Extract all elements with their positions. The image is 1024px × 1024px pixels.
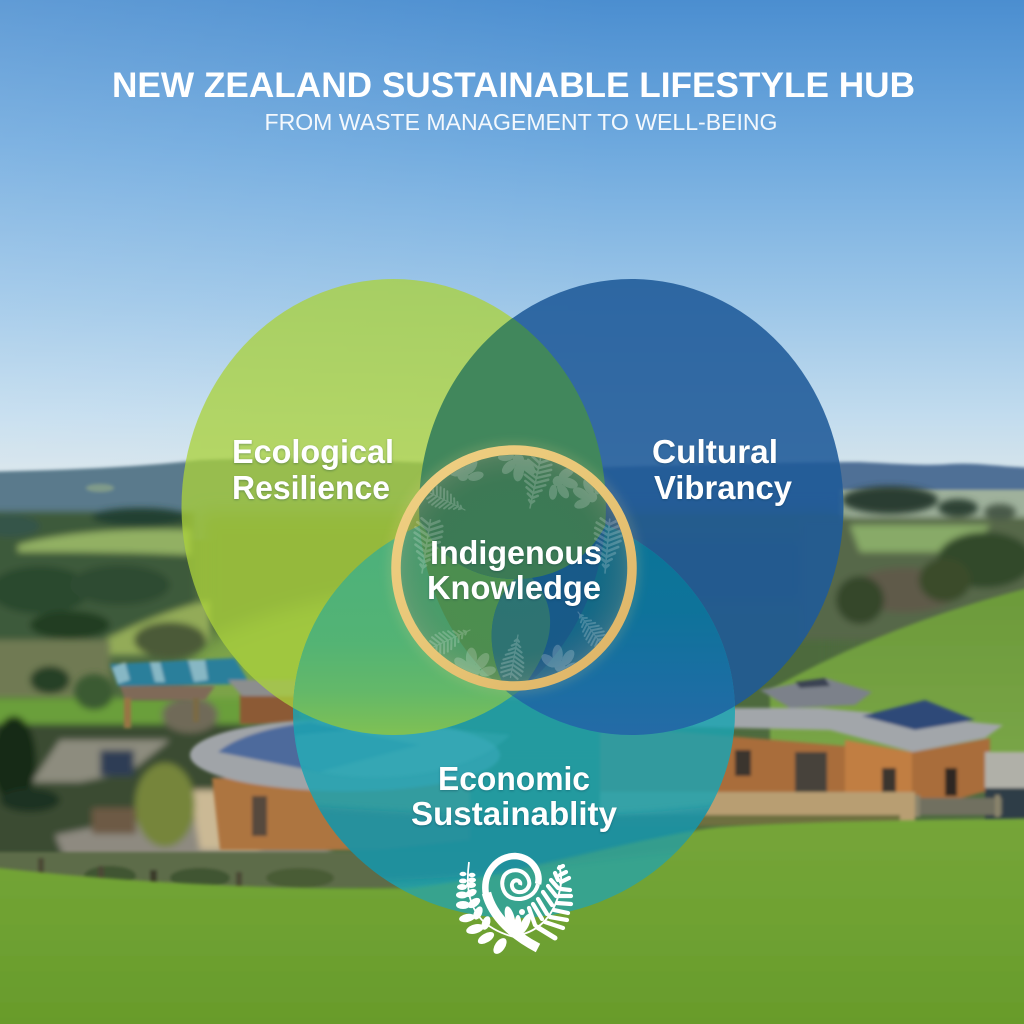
gold ring [396, 450, 632, 686]
overlap: ecological and economic [293, 526, 512, 735]
center label [427, 534, 602, 606]
overlap: cultural and economic [422, 524, 735, 735]
circle: economic sustainability [293, 506, 735, 918]
sky [0, 0, 1024, 490]
subtitle: FROM WASTE MANAGEMENT TO WELL-BEING [264, 109, 778, 135]
green hillside [770, 584, 1024, 770]
upper lens [419, 318, 606, 579]
center label: Knowledge [427, 569, 601, 606]
right solar building [600, 678, 1024, 826]
economic circle tonal bands [297, 732, 712, 918]
label: economic sustainability: Sustainablity [411, 795, 618, 832]
koru outer curl [485, 856, 539, 895]
label: economic sustainability: Economic [438, 760, 590, 797]
koru tail [486, 893, 538, 948]
soft mid-ground bands behind circles [190, 512, 840, 742]
fern pattern [409, 449, 623, 679]
title: NEW ZEALAND SUSTAINABLE LIFESTYLE HUB [112, 65, 915, 105]
ring glow [392, 446, 636, 690]
venn diagram [182, 279, 844, 930]
distant mountains [0, 459, 1024, 540]
right mid-distance fields and tree lines [800, 486, 1024, 640]
lower left of central lens [420, 520, 515, 692]
left solar canopy building [110, 658, 300, 728]
center circle: indigenous knowledge [392, 446, 636, 690]
label: ecological resilience: Ecological [232, 433, 394, 470]
circle: ecological resilience [182, 279, 606, 735]
center leaves [503, 905, 533, 936]
label: cultural vibrancy: Cultural [652, 433, 778, 470]
left lawn, trees and paths [0, 674, 330, 874]
lower right of central lens [512, 527, 605, 696]
label: ecological resilience [232, 433, 394, 506]
icon: koru fern emblem [456, 856, 571, 956]
label: ecological resilience: Resilience [232, 469, 390, 506]
left mid-distance fields and tree lines [0, 508, 210, 700]
koru inner spiral [502, 870, 538, 899]
foreground fence and shrubs [0, 852, 480, 904]
circle: cultural vibrancy [420, 279, 844, 735]
lower middle lens [492, 578, 550, 700]
label: cultural vibrancy: Vibrancy [654, 469, 793, 506]
ring shading [400, 454, 628, 682]
label: cultural vibrancy [652, 433, 793, 506]
land base [0, 500, 1024, 1024]
center label: Indigenous [430, 534, 602, 571]
right fern frond [520, 866, 571, 938]
foreground grass [0, 818, 1024, 1024]
left leaf sprig [456, 862, 518, 956]
label: economic sustainability [411, 760, 618, 832]
overlap: ecological and cultural [419, 318, 606, 696]
round solar building [190, 719, 500, 850]
